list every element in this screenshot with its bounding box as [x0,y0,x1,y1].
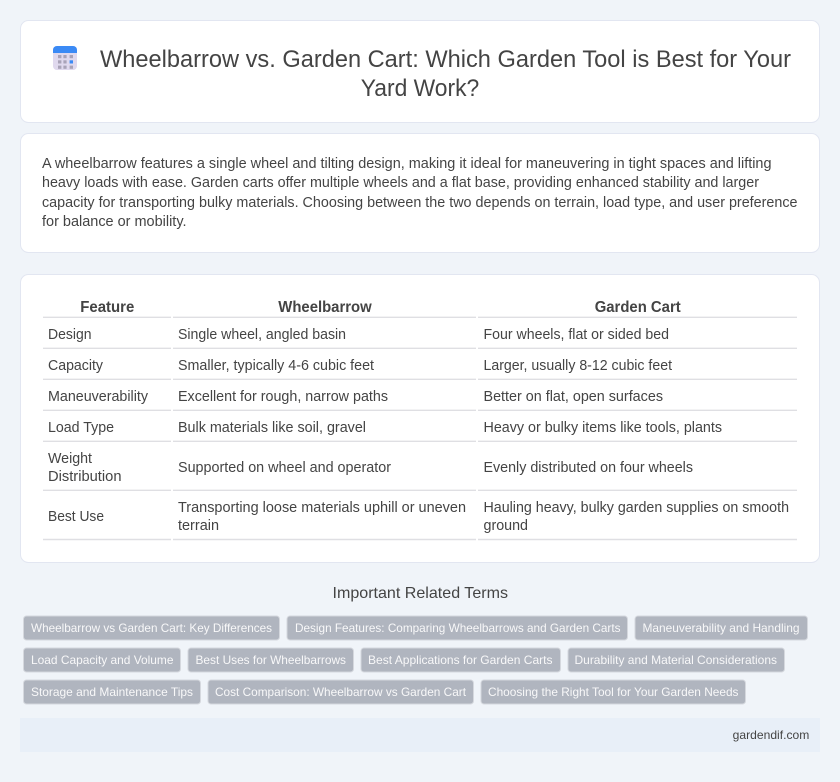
chip: storage: Storage and Maintenance Tips [31,685,193,699]
row: best use [48,500,789,534]
chip: choosing the right tool [481,680,746,704]
chip: best uses: Best Uses for Wheelbarrows [196,653,346,667]
panel: comparison table [20,274,820,562]
row: load type: Bulk materials like soil, gravel [178,420,366,436]
chip: load capacity: Load Capacity and Volume [31,653,174,667]
row: capacity: Smaller, typically 4-6 cubic feet [178,358,374,374]
row: load type [48,420,722,436]
intro paragraph: for balance or mobility. [42,214,186,230]
chip: design features: Design Features: Comparing Wheelbarrows and Garden Carts [295,621,620,635]
icon: calendar [53,46,77,70]
intro paragraph: heavy loads with ease. Garden carts offer multiple wheels and a flat base, providing enhanced stability and larger [42,175,759,191]
row: weight distribution: Supported on wheel and operator [178,460,391,476]
chip: best applications [361,648,560,672]
row: best use: terrain [178,518,219,534]
chip: maneuverability: Maneuverability and Handling [642,621,800,635]
chip: key differences: Wheelbarrow vs Garden Cart: Key Differences [31,621,272,635]
row: design: Four wheels, flat or sided bed [484,327,669,343]
panel: title header [20,20,820,122]
chip: design features [287,616,628,640]
row: maneuverability: Better on flat, open surfaces [484,389,663,405]
footer bar [20,718,820,752]
row: maneuverability: Maneuverability [48,389,149,405]
row: best use: Best Use [48,509,104,525]
title [100,46,791,102]
row: load type: Heavy or bulky items like tools, plants [484,420,722,436]
row: weight distribution: Distribution [48,469,122,485]
table header: Wheelbarrow [278,299,372,316]
row: design: Single wheel, angled basin [178,327,346,343]
row: best use: Transporting loose materials uphill or uneven [178,500,466,516]
row: capacity [48,358,672,374]
chip: best applications: Best Applications for Garden Carts [368,653,552,667]
chip: cost comparison: Cost Comparison: Wheelbarrow vs Garden Cart [215,685,467,699]
title: Wheelbarrow vs. Garden Cart: Which Garden Tool is Best for Your [100,46,791,73]
intro paragraph: A wheelbarrow features a single wheel and tilting design, making it ideal for maneuvering in tight spaces and lifting [42,156,772,172]
chip: cost comparison [208,680,474,704]
related term chips [24,616,808,704]
row: best use: ground [484,518,528,534]
row: weight distribution: Weight [48,451,92,467]
table header: Garden Cart [595,299,681,316]
table header: Feature [80,299,134,316]
chip: durability [568,648,784,672]
chip: best uses [188,648,354,672]
heading: related terms: Important Related Terms [332,585,508,602]
row: best use: Hauling heavy, bulky garden supplies on smooth [484,500,789,516]
table header [80,299,681,316]
title: Yard Work? [361,75,479,102]
row: design [48,327,669,343]
panel: intro text [20,134,820,252]
chip: load capacity [24,648,180,672]
row: maneuverability [48,389,663,405]
row: design: Design [48,327,92,343]
chip: key differences [24,616,280,640]
row: maneuverability: Excellent for rough, narrow paths [178,389,388,405]
chip: choosing the right tool: Choosing the Right Tool for Your Garden Needs [488,685,738,699]
row: capacity: Larger, usually 8-12 cubic feet [484,358,672,374]
footer source: gardendif.com [733,728,809,742]
row: weight distribution [48,451,693,485]
intro paragraph: capacity for transporting bulky materials. Choosing between the two depends on terrain, load type, and user preference [42,195,798,211]
intro paragraph [42,156,798,230]
chip: durability: Durability and Material Considerations [574,653,777,667]
row: capacity: Capacity [48,358,104,374]
row: weight distribution: Evenly distributed on four wheels [484,460,693,476]
chip: maneuverability [635,616,808,640]
chip: storage [24,680,200,704]
row: load type: Load Type [48,420,114,436]
